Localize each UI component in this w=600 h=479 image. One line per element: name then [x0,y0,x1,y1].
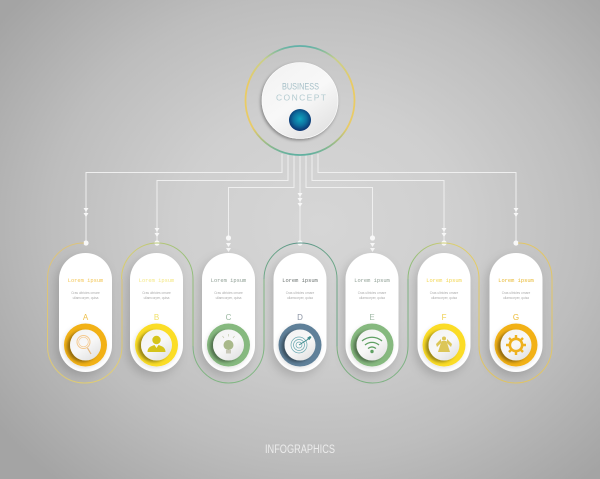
panel D: Lorem ipsum [282,278,318,284]
panel E [346,253,398,372]
panel D: D [297,313,303,322]
icon: light bulb [222,334,234,354]
footer label: INFOGRAPHICS [265,444,335,456]
icon: magnifier [77,336,91,354]
panel G: G [513,313,519,322]
panel A: A [83,313,89,322]
panel F: ullamcorper, quisa [431,296,457,300]
panel C: Cras ultricies ornare [214,291,243,295]
icon: person [148,336,166,352]
panel A [59,253,112,372]
panel B [130,253,183,372]
panel F: Lorem ipsum [426,278,462,284]
panel C: C [226,313,232,322]
connector dots [83,235,519,246]
panel G: Lorem ipsum [498,278,534,284]
icon: wifi [362,337,382,353]
central hub [246,46,354,155]
icon: gear [506,335,526,355]
hub disc [262,62,338,138]
arrow markers [84,193,518,252]
panel F: Cras ultricies ornare [430,291,458,295]
panel D [274,253,326,372]
panel E: ullamcorper, quisa [359,296,385,300]
panel G: Cras ultricies ornare [502,291,530,295]
panel G [490,253,542,372]
panel B: Cras ultricies ornare [142,291,171,295]
panel D: Cras ultricies ornare [286,291,314,295]
panel A: Lorem ipsum [68,278,103,284]
winding outline around panels [48,243,552,383]
icon: figure [436,336,452,352]
hub sphere [289,109,311,131]
panel B: B [154,313,159,322]
panel B: ullamcorper, quisa [144,296,170,300]
panel B: Lorem ipsum [139,278,174,284]
panel C: ullamcorper, quisa [216,296,242,300]
panel E: E [369,313,375,322]
panel D: ullamcorper, quisa [287,296,313,300]
panel E: Lorem ipsum [354,278,390,284]
panel F: F [442,313,447,322]
panel E: Cras ultricies ornare [358,291,386,295]
panel C [202,253,255,372]
hub outer ring [246,46,354,155]
panel A: ullamcorper, quisa [73,296,99,300]
connector lines [86,154,516,243]
panel C: Lorem ipsum [211,278,246,284]
panel G: ullamcorper, quisa [503,296,529,300]
panel F [418,253,470,372]
hub title: BUSINESS [282,82,319,92]
hub subtitle: CONCEPT [276,92,326,102]
icon: target [291,336,312,353]
panel A: Cras ultricies ornare [71,291,100,295]
